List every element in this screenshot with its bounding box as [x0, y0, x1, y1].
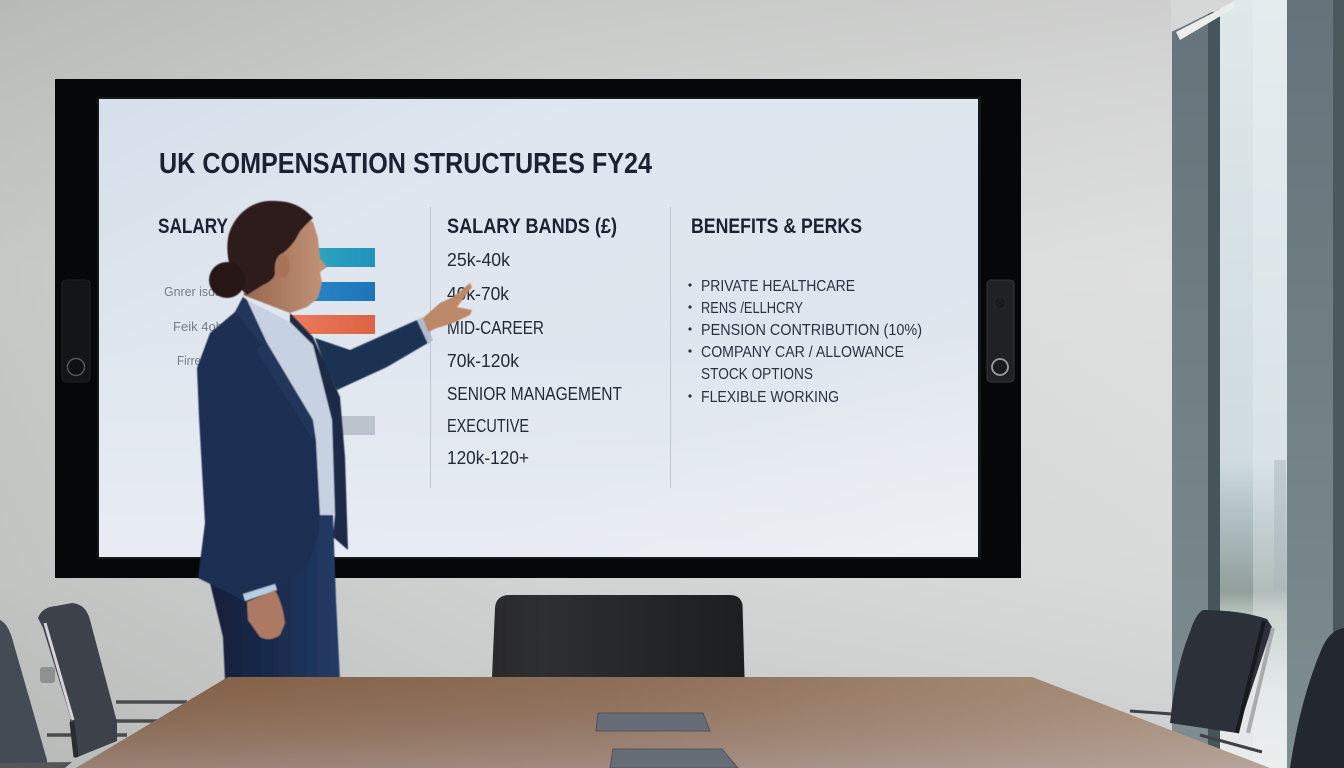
column: benefits and perks: COMPANY CAR / ALLOWANCE — [701, 344, 904, 361]
column: salary bands: EXECUTIVE — [447, 416, 529, 436]
table port: upper — [596, 713, 710, 731]
presenter — [197, 201, 472, 680]
bar chart — [290, 248, 375, 435]
trousers — [210, 513, 340, 680]
jacket right panel — [290, 313, 348, 550]
ear — [276, 254, 290, 278]
column: salary bands: SENIOR MANAGEMENT — [447, 384, 622, 404]
presentation slide — [99, 99, 978, 557]
column heading: salary: SALARY — [158, 215, 228, 238]
bar chart labels — [164, 284, 227, 368]
shirt cuff, lowered arm — [243, 584, 277, 601]
conference table — [76, 677, 1270, 768]
column: benefits and perks — [688, 215, 922, 406]
shirt — [247, 300, 335, 515]
right speaker — [987, 280, 1014, 382]
bar chart labels: Firre — [177, 353, 201, 368]
column: benefits and perks: FLEXIBLE WORKING — [701, 389, 839, 406]
column: salary bands: 70k-120k — [447, 351, 520, 371]
shirt cuff, pointing arm — [417, 317, 433, 344]
column: benefits and perks: RENS /ELLHCRY — [701, 300, 803, 317]
column: salary bands: 25k-40k — [447, 250, 511, 270]
jacket — [197, 297, 320, 600]
raised sleeve — [315, 320, 428, 390]
bar chart labels: Feik 4ob — [173, 319, 223, 334]
pointing hand — [423, 283, 472, 332]
column: salary bands: 40k-70k — [447, 284, 510, 304]
window blind — [1171, 0, 1236, 32]
column: salary bands: SALARY BANDS (£) — [447, 215, 617, 238]
right chairs — [1130, 610, 1344, 768]
column: benefits and perks: BENEFITS & PERKS — [691, 215, 862, 238]
column: benefits and perks: STOCK OPTIONS — [701, 366, 813, 383]
window and pillars — [1171, 0, 1344, 768]
column: salary bands: MID-CAREER — [447, 318, 544, 338]
table port: lower — [610, 749, 738, 768]
neck and face — [243, 215, 327, 313]
column dividers — [430, 207, 671, 488]
bar chart labels: Gnrer isdar — [164, 284, 227, 299]
hair — [227, 201, 313, 295]
column: benefits and perks: PRIVATE HEALTHCARE — [701, 278, 855, 295]
jacket lapel — [235, 297, 313, 440]
wall-mounted display frame — [55, 79, 1021, 578]
column: salary bands — [447, 215, 622, 468]
column: salary bands: 120k-120+ — [447, 448, 529, 468]
centre chair — [492, 595, 745, 677]
lowered hand — [247, 590, 285, 639]
left chairs — [0, 603, 187, 768]
column: benefits and perks: PENSION CONTRIBUTION (10%) — [701, 322, 922, 339]
left speaker — [62, 280, 90, 382]
title: UK COMPENSATION STRUCTURES FY24 — [159, 148, 652, 180]
